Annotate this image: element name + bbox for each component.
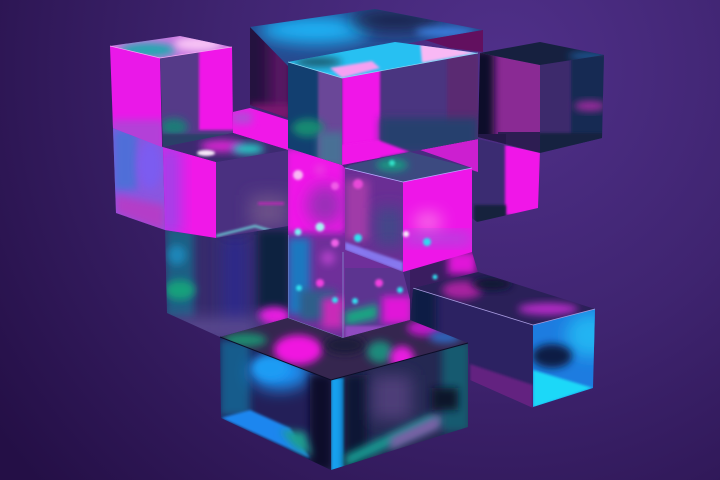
cube: top left bbox=[108, 34, 236, 150]
cube: bottom right slab bbox=[410, 272, 595, 408]
column cube with particles bbox=[285, 145, 415, 340]
magenta glow panel behind bbox=[233, 108, 288, 150]
small glass behind bottom right bbox=[410, 252, 478, 318]
cube: center front bbox=[340, 150, 475, 275]
cube: front center large bbox=[285, 40, 480, 170]
cube: bottom large bbox=[220, 318, 468, 470]
cube: right lower bbox=[420, 139, 540, 222]
cube: top back slab bbox=[250, 9, 483, 118]
cube: left under top bbox=[113, 128, 165, 230]
cube: right top bbox=[478, 42, 604, 153]
glowing particles bbox=[293, 160, 438, 304]
cube: lower left bbox=[160, 225, 290, 340]
cube: left middle bbox=[160, 130, 290, 240]
slab right side bbox=[425, 30, 483, 52]
